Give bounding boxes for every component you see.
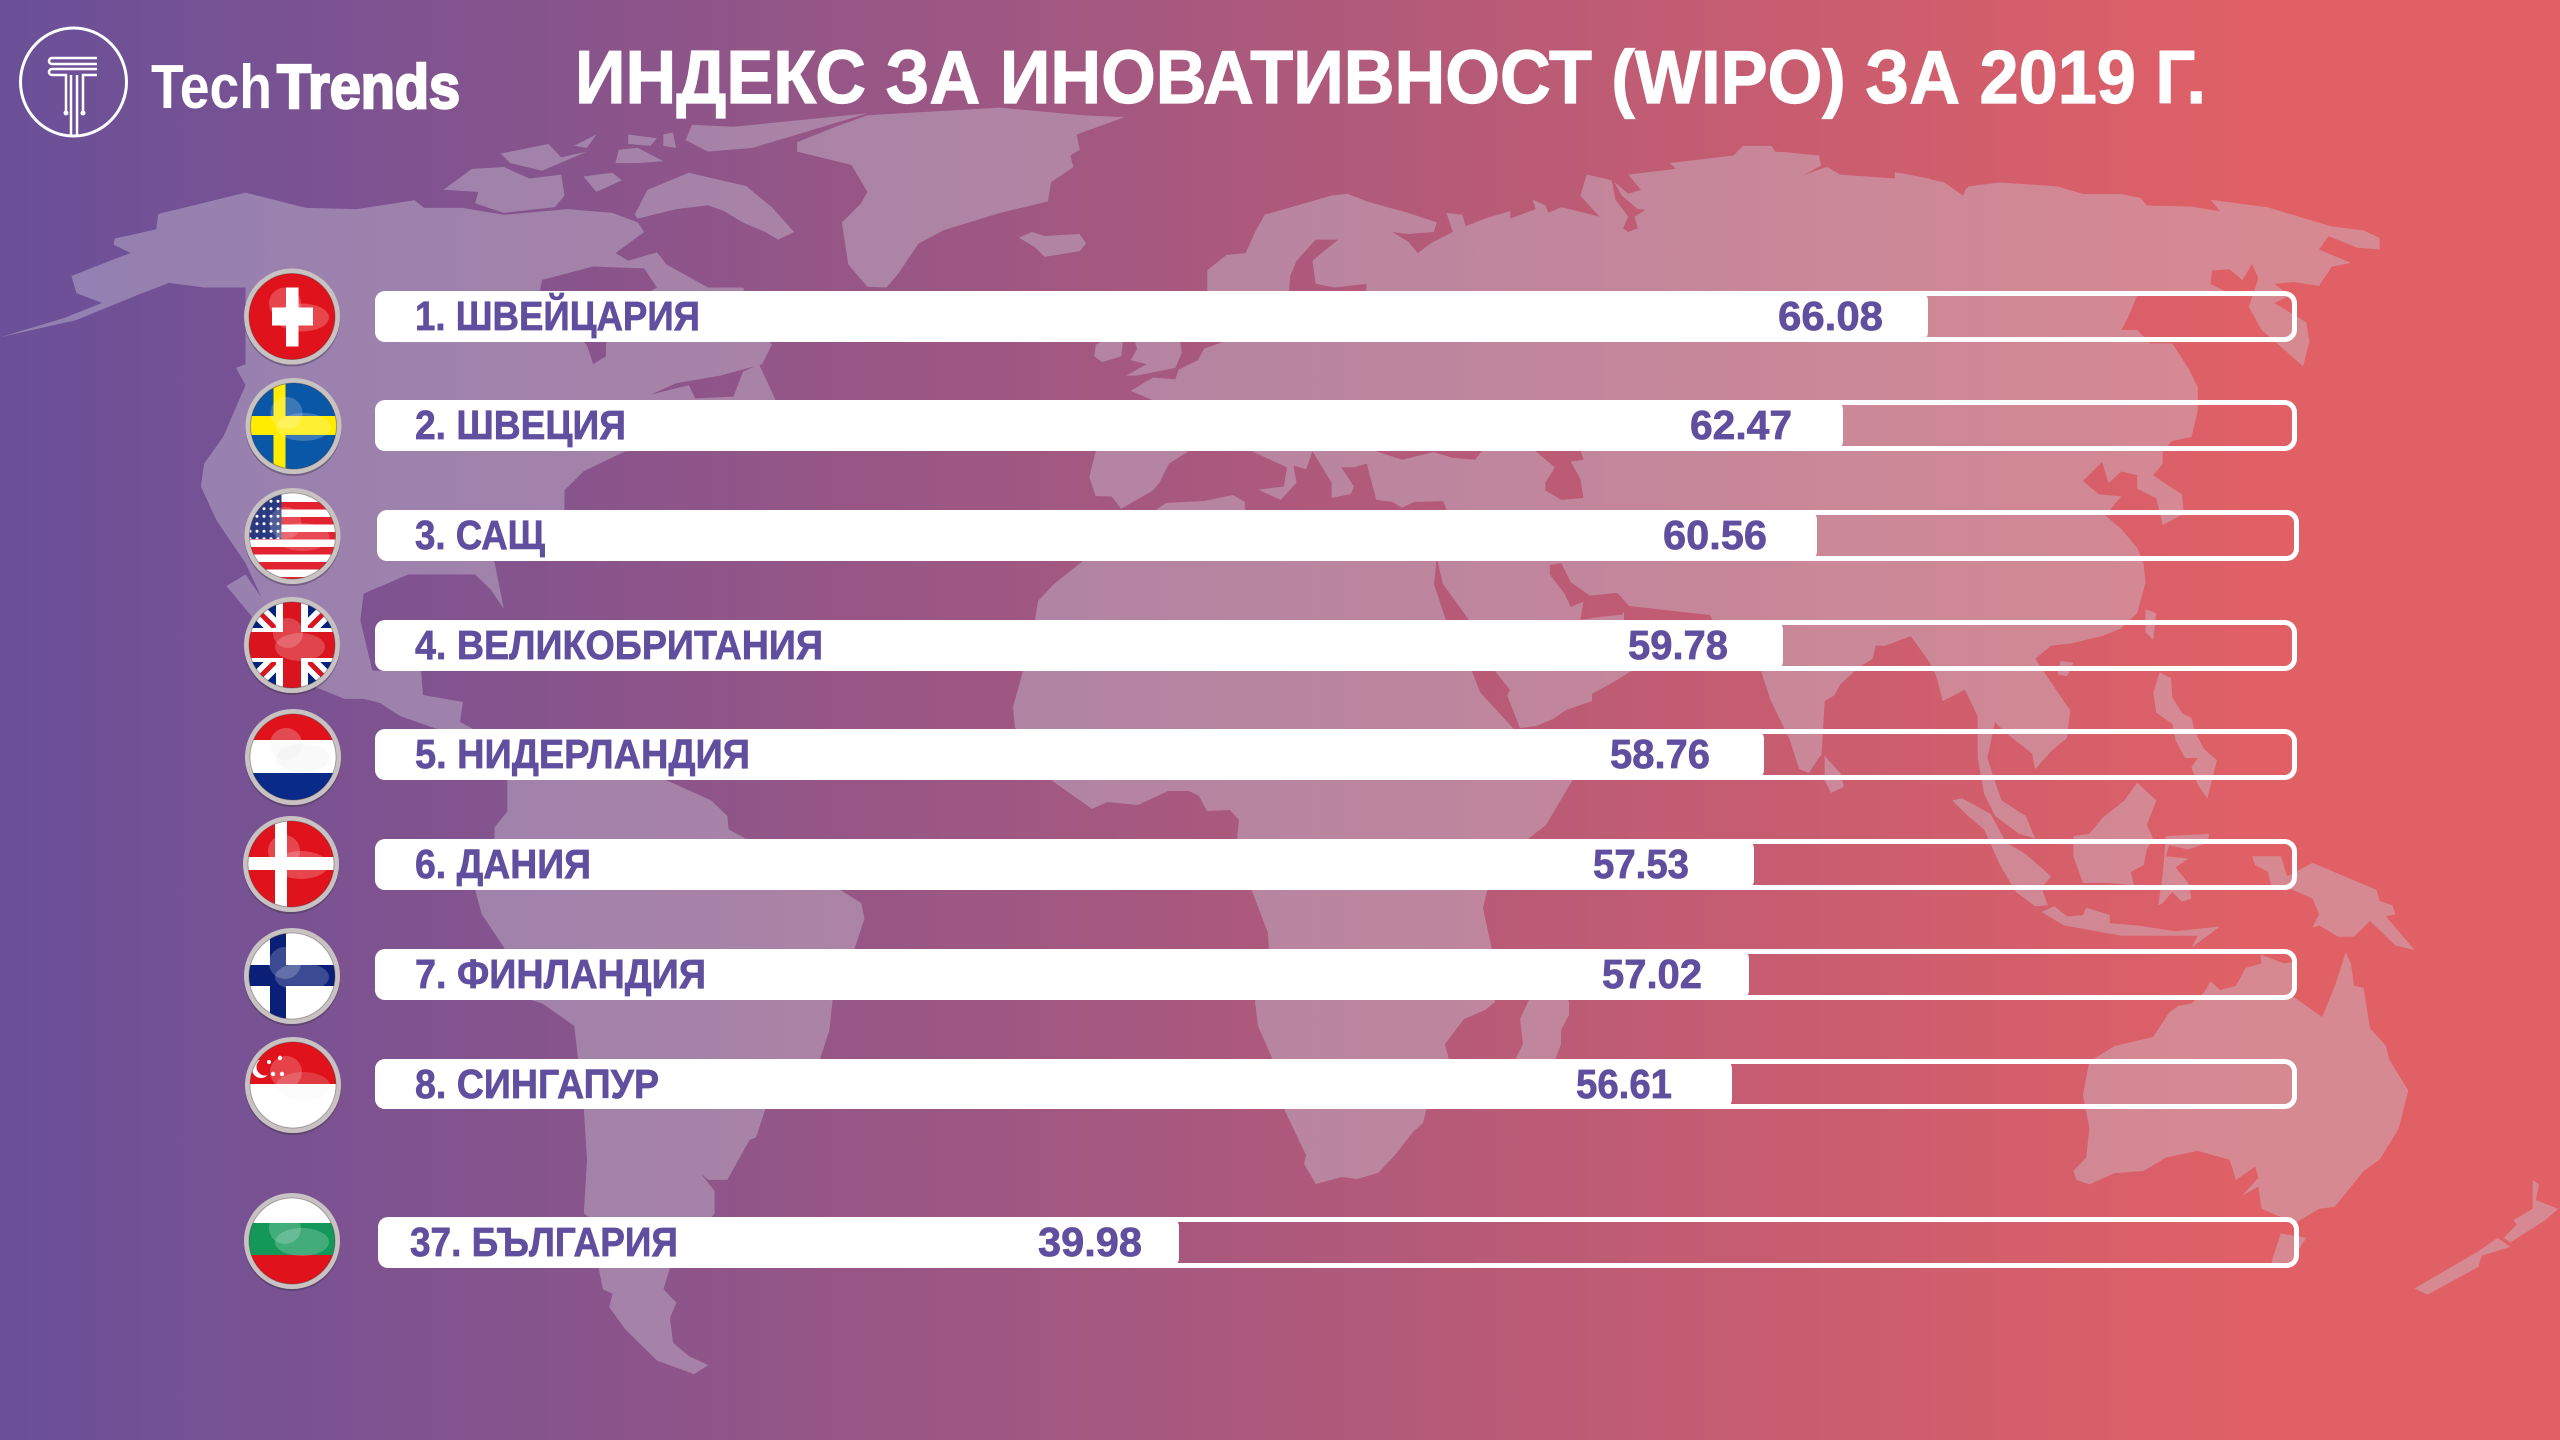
bar 5 xyxy=(375,729,2294,780)
value 3: 60.56 xyxy=(1663,512,1767,558)
value 8: 56.61 xyxy=(1576,1061,1672,1107)
bar 7 xyxy=(375,949,2294,1000)
bar 8 xyxy=(375,1059,2294,1109)
row 1: Швейцария xyxy=(244,268,2294,366)
logo: TechTrends xyxy=(20,28,272,136)
bar 3 xyxy=(377,510,2296,561)
label 3: 3. САЩ xyxy=(415,512,545,558)
flag: Singapore xyxy=(245,1037,341,1135)
row 37: България xyxy=(244,1193,2296,1291)
label 4: 4. ВЕЛИКОБРИТАНИЯ xyxy=(415,622,823,668)
logo icon: T in circle xyxy=(20,28,126,136)
bar 4 xyxy=(375,620,2294,671)
value 1: 66.08 xyxy=(1778,293,1883,339)
flag: United Kingdom xyxy=(244,597,340,695)
value 2: 62.47 xyxy=(1690,402,1792,448)
bar 1 xyxy=(375,291,2294,342)
logo wordmark: Tech xyxy=(151,53,272,122)
value 37: 39.98 xyxy=(1038,1219,1142,1265)
label 7: 7. ФИНЛАНДИЯ xyxy=(415,951,706,997)
flag: Sweden xyxy=(246,378,342,476)
label 2: 2. ШВЕЦИЯ xyxy=(415,402,626,448)
label 1: 1. ШВЕЙЦАРИЯ xyxy=(415,293,700,339)
flag: Finland xyxy=(244,928,340,1026)
row 8: Сингапур xyxy=(245,1037,2294,1135)
bar 2 xyxy=(375,400,2294,451)
row 6: Дания xyxy=(243,816,2294,914)
row 2: Швеция xyxy=(246,378,2294,476)
bar 6 xyxy=(375,839,2294,890)
flag: Denmark xyxy=(243,816,339,914)
label 5: 5. НИДЕРЛАНДИЯ xyxy=(415,731,750,777)
value 4: 59.78 xyxy=(1628,622,1728,668)
flag: Bulgaria xyxy=(244,1193,340,1291)
flag: Netherlands xyxy=(245,709,341,807)
row 5: Нидерландия xyxy=(245,709,2294,807)
label 6: 6. ДАНИЯ xyxy=(415,841,591,887)
row 3: САЩ xyxy=(244,488,2296,586)
logo wordmark bold part: Trends xyxy=(277,53,460,122)
flag: USA xyxy=(244,488,340,586)
row 7: Финландия xyxy=(244,928,2294,1026)
value 7: 57.02 xyxy=(1602,951,1702,997)
row 4: Великобритания xyxy=(244,597,2294,695)
title: ИНДЕКС ЗА ИНОВАТИВНОСТ (WIPO) ЗА 2019 Г. xyxy=(575,35,2206,119)
label 37: 37. БЪЛГАРИЯ xyxy=(410,1219,678,1265)
value 5: 58.76 xyxy=(1610,731,1710,777)
value 6: 57.53 xyxy=(1593,841,1689,887)
label 8: 8. СИНГАПУР xyxy=(415,1061,659,1107)
bar 37 xyxy=(378,1217,2296,1268)
flag: Switzerland xyxy=(244,268,340,366)
